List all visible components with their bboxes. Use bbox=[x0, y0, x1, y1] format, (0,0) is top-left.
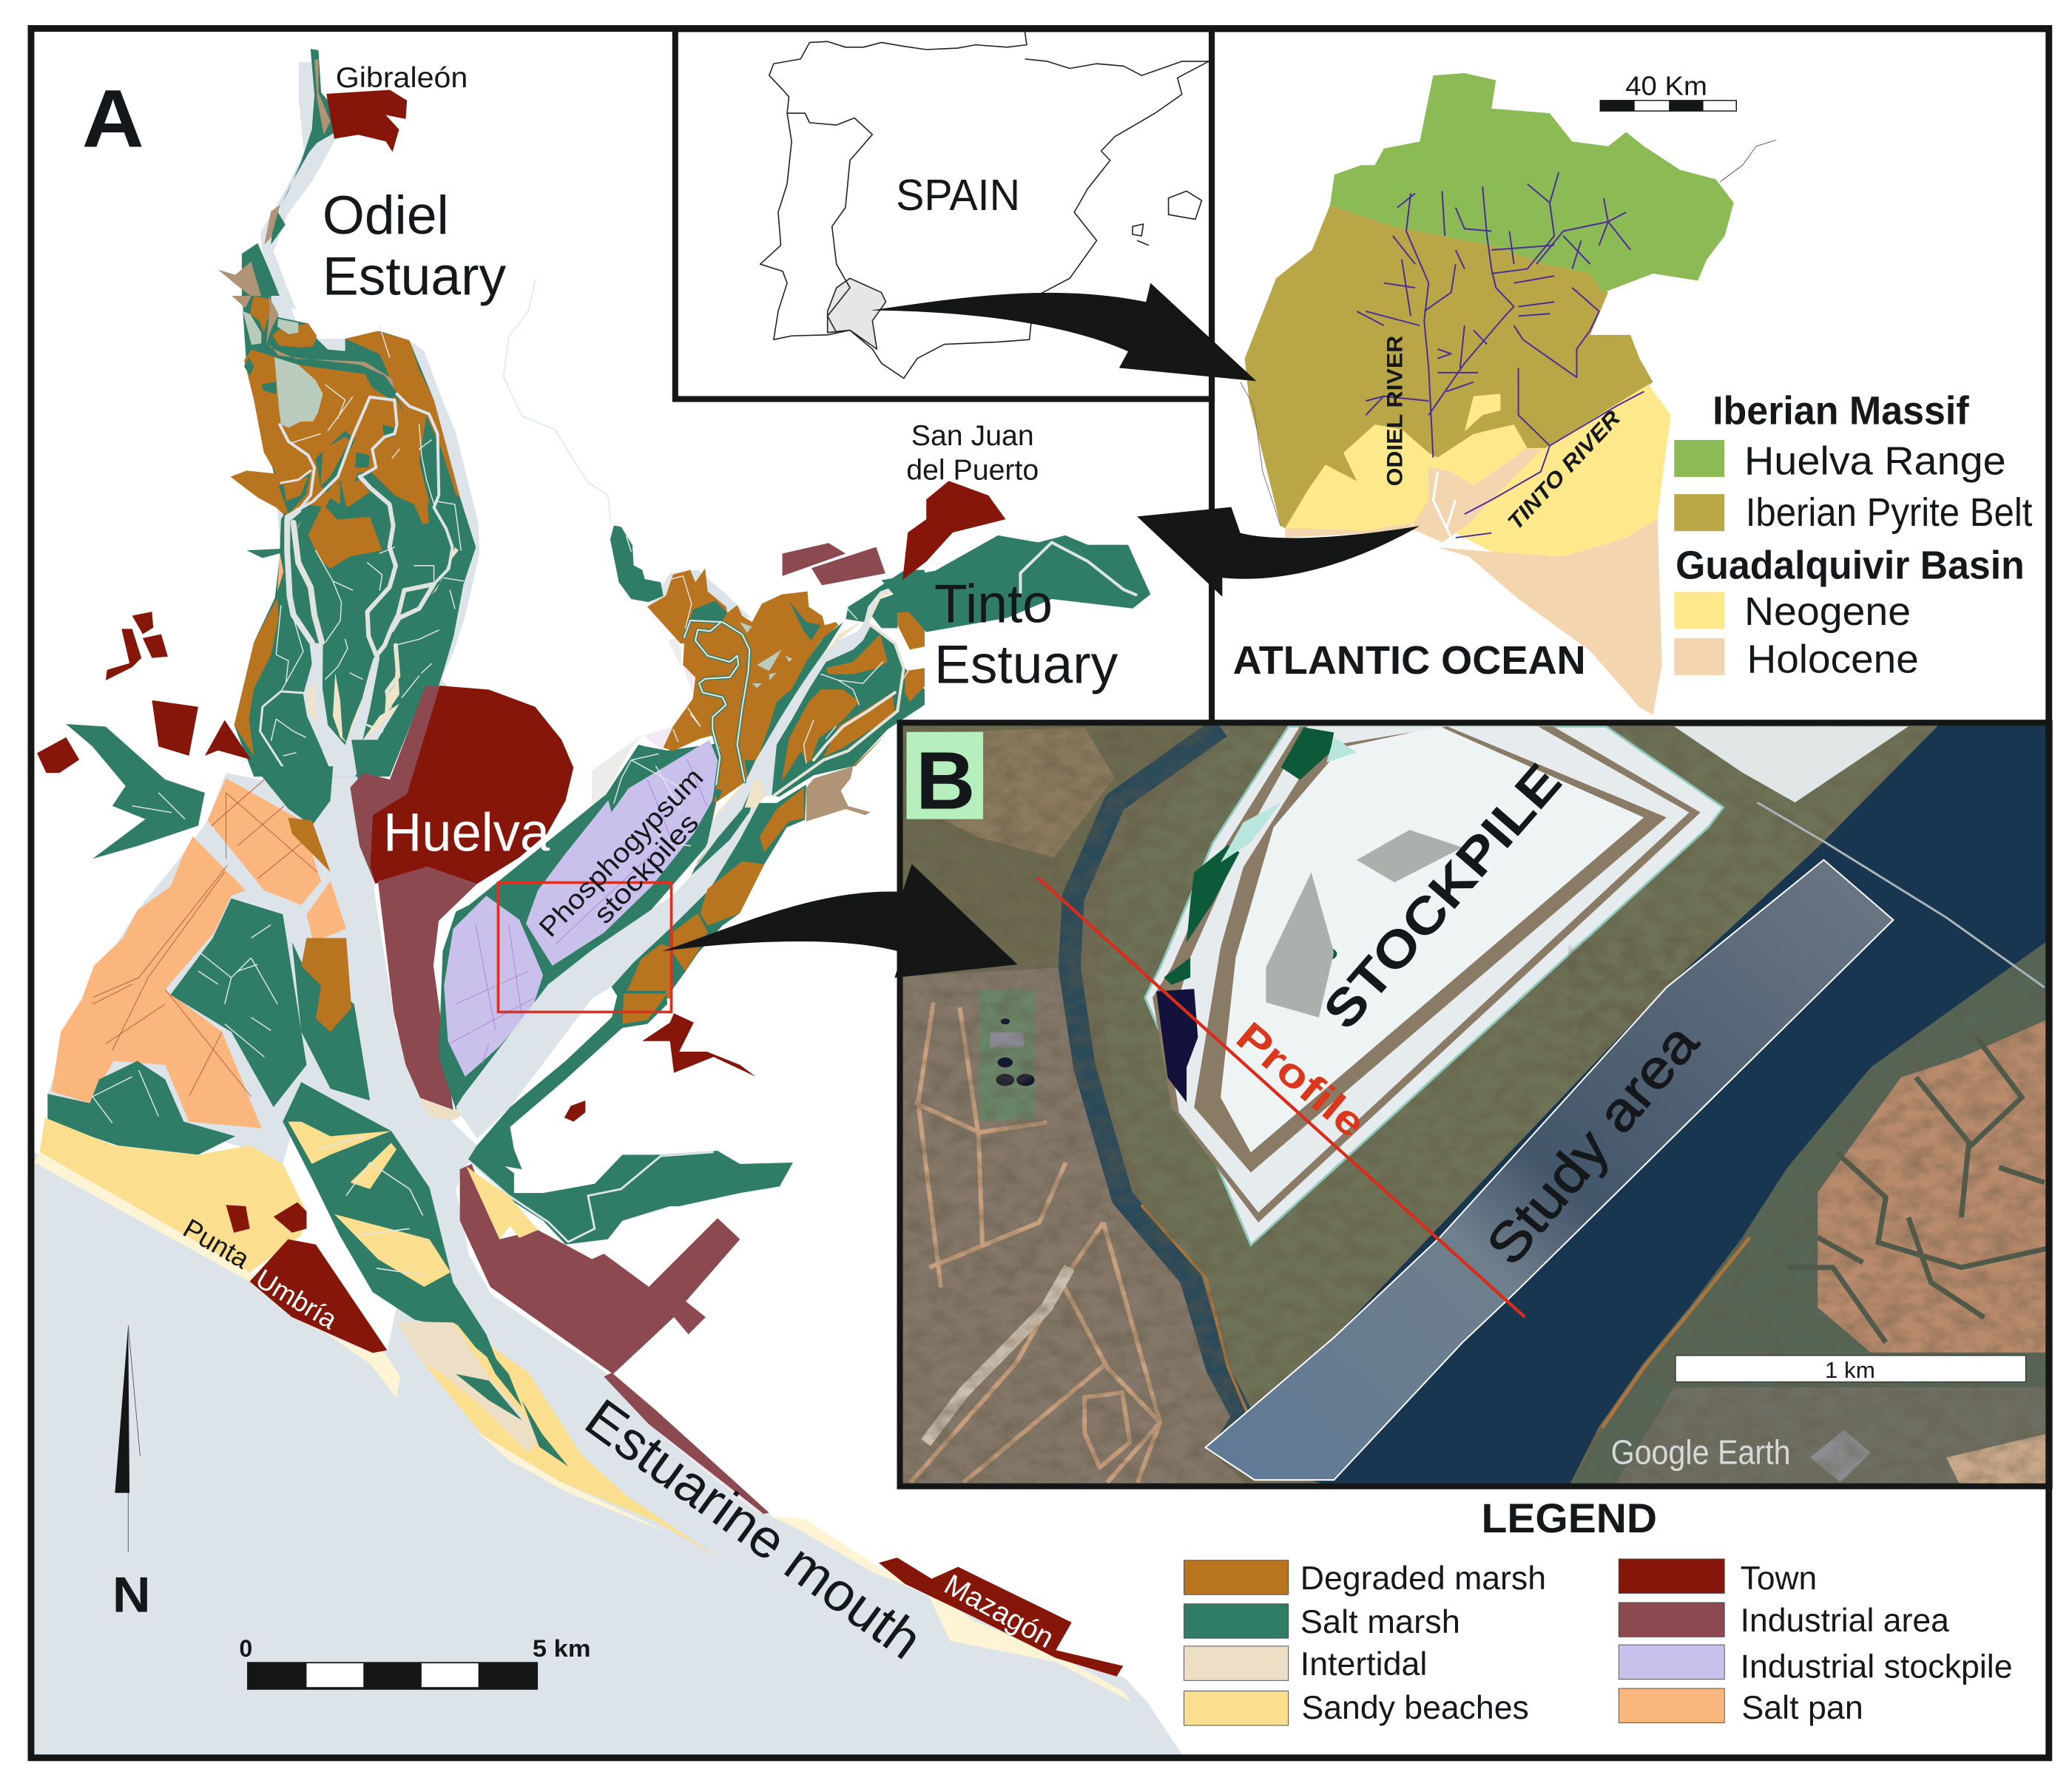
degraded marsh west lower bbox=[234, 598, 279, 756]
N label: N bbox=[112, 1567, 151, 1623]
teal strip along channel bbox=[757, 622, 843, 760]
satellite scale bar: 1 km bbox=[1825, 1359, 1875, 1383]
Tinto lower water bbox=[456, 950, 592, 1139]
stockpile north marsh bbox=[607, 745, 664, 812]
cream sand bars bbox=[296, 507, 459, 745]
marsh east of stockpile bbox=[1100, 728, 1946, 1447]
east island marsh bbox=[292, 942, 370, 1100]
salt pan dykes bbox=[92, 779, 317, 1097]
water halo bbox=[271, 296, 479, 686]
small salt pan bbox=[277, 553, 283, 592]
geology map bbox=[1241, 73, 1776, 714]
spit marsh fragments bbox=[449, 1314, 568, 1467]
label TINTO RIVER: TINTO RIVER bbox=[1503, 405, 1626, 535]
text Huelva Range: Huelva Range bbox=[1744, 439, 2006, 483]
teal bits in orange bbox=[244, 357, 433, 550]
lower right land bbox=[1613, 1387, 2052, 1487]
text intertidal: Intertidal bbox=[1300, 1646, 1427, 1683]
profile line bbox=[1037, 877, 1525, 1317]
halo bbox=[649, 570, 752, 619]
texture on marsh bbox=[1568, 938, 2052, 1487]
swatch Neogene bbox=[1674, 592, 1724, 629]
label Tinto Estuary: Estuary bbox=[934, 635, 1118, 695]
north arrow bbox=[115, 1325, 140, 1552]
text Neogene: Neogene bbox=[1744, 589, 1911, 634]
marsh east of trunk bbox=[351, 740, 396, 782]
orange patch island bbox=[301, 938, 351, 1032]
arrow: map A to panel B bbox=[662, 864, 1017, 978]
east Tinto marsh bbox=[881, 535, 1150, 632]
panel frame lines for geology map bbox=[1212, 29, 2048, 724]
canal shore bbox=[1141, 1205, 1249, 1418]
west salt marsh arm bbox=[66, 724, 205, 859]
swatch salt pan bbox=[1619, 1688, 1724, 1722]
label Estuarine mouth: Estuarine mouth bbox=[575, 1387, 933, 1671]
Punta Umbria blocks bbox=[226, 1203, 306, 1233]
teal upper right bbox=[846, 570, 925, 622]
treatment plant bbox=[979, 990, 1036, 1120]
coast line bbox=[1241, 382, 1280, 526]
eastern towns bbox=[564, 1013, 756, 1122]
inner terrace bbox=[1194, 726, 1667, 1172]
neogene patch bbox=[1465, 394, 1500, 432]
stream top-right bbox=[1721, 140, 1776, 182]
trunk water bbox=[303, 643, 399, 777]
south spit yellow bbox=[415, 1322, 716, 1556]
swatch industrial area bbox=[1619, 1603, 1724, 1637]
teal band under top bbox=[280, 346, 302, 348]
teal in north block bbox=[690, 601, 821, 802]
panel A: estuary map bbox=[34, 49, 1185, 1759]
geology scale bar: 40 Km bbox=[1625, 72, 1707, 101]
light embankment bbox=[926, 1268, 1070, 1442]
salt pans south bbox=[52, 836, 262, 1129]
salt pans north bbox=[207, 778, 321, 905]
grey smudges bbox=[1266, 830, 1462, 1018]
label Profile: Profile bbox=[1228, 1013, 1374, 1146]
panel: Spain locator bbox=[675, 29, 1212, 399]
label Odiel Estuary: Estuary bbox=[323, 246, 507, 306]
brown and grey top pieces bbox=[232, 296, 252, 308]
south Tinto arm bbox=[468, 1146, 793, 1245]
scale bar: 0 bbox=[239, 1635, 252, 1662]
western towns bbox=[37, 612, 251, 773]
label San Juan del Puerto: San Juan bbox=[911, 419, 1034, 452]
grey ground bbox=[592, 734, 644, 812]
inner teal loop bbox=[871, 593, 925, 628]
top-right stockpile bbox=[1674, 726, 1909, 802]
south band marsh bbox=[612, 785, 806, 998]
label Gibraleon: Gibraleón bbox=[336, 61, 468, 94]
text salt marsh: Salt marsh bbox=[1300, 1604, 1460, 1640]
river bbox=[1206, 717, 2072, 1487]
neogene bbox=[1285, 385, 1671, 557]
pyrite belt bbox=[1245, 205, 1653, 533]
roads bbox=[911, 1002, 1160, 1483]
San Juan industrial blocks bbox=[783, 543, 885, 585]
brown stream bbox=[269, 343, 394, 389]
river shore bbox=[1602, 1237, 1749, 1427]
label Odiel Estuary: Odiel bbox=[323, 185, 449, 246]
label Tinto Estuary: Tinto bbox=[934, 573, 1053, 634]
upper river marsh fragments bbox=[217, 49, 334, 311]
south band orange bbox=[627, 788, 804, 998]
rivers bbox=[1357, 172, 1644, 538]
holocene left bbox=[1285, 524, 1415, 538]
Iberia outline bbox=[760, 32, 1209, 379]
arrow: Spain to geology map bbox=[871, 283, 1256, 381]
dark green patches bbox=[1164, 728, 1337, 985]
salt pan small bbox=[306, 882, 346, 942]
pale strip at estuary mouth bbox=[647, 1424, 764, 1514]
west island marsh bbox=[170, 899, 306, 1107]
legend title: LEGEND bbox=[1482, 1495, 1657, 1541]
label Huelva: Huelva bbox=[383, 802, 550, 862]
south spit sand bbox=[476, 1431, 716, 1556]
central lower island bbox=[283, 1082, 486, 1334]
text town: Town bbox=[1741, 1560, 1817, 1597]
west beach bbox=[40, 1117, 306, 1272]
text salt pan: Salt pan bbox=[1741, 1690, 1863, 1726]
outer terrace bbox=[1153, 726, 1701, 1222]
main channels bbox=[260, 326, 464, 768]
sea and estuary water bbox=[34, 714, 1185, 1759]
stockpile upper bbox=[526, 740, 719, 966]
spit intertidal bbox=[396, 1321, 541, 1453]
teal arm bbox=[610, 525, 664, 602]
pond bbox=[1156, 989, 1198, 1103]
south-west marsh bbox=[47, 1061, 235, 1154]
Punta Umbria town bbox=[250, 1240, 387, 1353]
swatch Iberian Pyrite Belt bbox=[1674, 494, 1724, 531]
island yellow strips bbox=[288, 1122, 450, 1287]
canal bbox=[1070, 728, 1243, 1452]
legend heading Guadalquivir Basin: Guadalquivir Basin bbox=[1676, 543, 2025, 587]
text industrial stockpile: Industrial stockpile bbox=[1741, 1649, 2013, 1685]
label Mazagon: Mazagón bbox=[939, 1568, 1059, 1654]
arrow: geology map to estuary bbox=[1137, 507, 1420, 597]
label A: A bbox=[82, 73, 144, 164]
Huelva industrial strip bbox=[350, 686, 440, 884]
channel island bbox=[692, 785, 757, 875]
aqua haze near green patches bbox=[1221, 737, 1357, 862]
legend heading Iberian Massif: Iberian Massif bbox=[1712, 388, 1969, 433]
satellite scale bar bbox=[1676, 1356, 2025, 1383]
stockpile lower-left bbox=[444, 896, 543, 1077]
label STOCKPILE: STOCKPILE bbox=[1312, 753, 1573, 1040]
land base bbox=[888, 717, 2072, 1498]
upper Odiel river band bbox=[260, 62, 336, 309]
geology scale bar bbox=[1600, 72, 1736, 111]
holocene bbox=[1437, 519, 1662, 714]
bridge bbox=[1757, 802, 2045, 987]
south arm channel bbox=[468, 1152, 714, 1242]
inner orange patches bbox=[283, 437, 429, 569]
stockpile marsh surround bbox=[439, 744, 724, 1110]
swatch Huelva Range bbox=[1674, 440, 1724, 477]
right marsh bbox=[1568, 938, 2052, 1487]
faint stream bbox=[504, 280, 610, 522]
plateau bbox=[1221, 726, 1644, 1152]
Tinto south shore orange bbox=[622, 993, 667, 1024]
degraded marsh east strip bbox=[345, 331, 460, 497]
Gibraleon town bbox=[326, 90, 407, 152]
label Atlantic Ocean: ATLANTIC OCEAN bbox=[1233, 638, 1586, 683]
text industrial area: Industrial area bbox=[1741, 1603, 1949, 1639]
texture on land bbox=[888, 717, 2072, 1498]
text Iberian Pyrite Belt: Iberian Pyrite Belt bbox=[1746, 490, 2033, 535]
brown patch bbox=[806, 766, 871, 822]
Tinto estuary detail bbox=[592, 525, 925, 998]
sand near Mazagon bbox=[769, 1515, 1131, 1702]
south industrial area bbox=[460, 1164, 740, 1374]
study area bbox=[1206, 860, 1893, 1480]
label SPAIN: SPAIN bbox=[896, 172, 1020, 220]
degraded marsh main bbox=[231, 350, 429, 524]
geology legend bbox=[1674, 388, 2033, 681]
swatch town bbox=[1619, 1559, 1724, 1593]
small marsh creeks bbox=[92, 793, 277, 1123]
estuary white channels bbox=[1433, 472, 1456, 538]
Tinto estuary grounds bbox=[592, 570, 752, 812]
south yellow triangle bbox=[467, 1166, 538, 1240]
Odiel estuary marshes bbox=[231, 296, 479, 777]
Tinto water bbox=[592, 586, 925, 998]
west channel water bbox=[47, 773, 325, 1164]
label Punta: Punta bbox=[178, 1213, 255, 1275]
selected area rectangle bbox=[498, 882, 671, 1012]
label Study area: Study area bbox=[1475, 1012, 1710, 1276]
degraded marsh top bbox=[272, 323, 317, 348]
label Phosphogypsum stockpiles: Phosphogypsum bbox=[533, 762, 709, 943]
text Holocene: Holocene bbox=[1747, 637, 1919, 681]
Huelva industrial south bbox=[378, 867, 477, 1110]
green patches bbox=[740, 622, 793, 688]
label Phosphogypsum stockpiles: stockpiles bbox=[587, 808, 704, 930]
swatch Holocene bbox=[1674, 638, 1724, 675]
Tinto south shore band bbox=[468, 991, 667, 1169]
swatch degraded marsh bbox=[1184, 1560, 1289, 1594]
stockpile lines bbox=[449, 760, 707, 1063]
scale bar bbox=[239, 1635, 590, 1690]
salt marsh base bbox=[234, 296, 476, 777]
top-left scrub bbox=[888, 717, 1213, 978]
left land bbox=[888, 967, 1251, 1487]
lilac ground bbox=[644, 662, 695, 749]
salmon marsh patches bbox=[1818, 1018, 2052, 1353]
text sandy beaches: Sandy beaches bbox=[1302, 1690, 1529, 1726]
Google Earth mark: Google Earth bbox=[1611, 1433, 1791, 1471]
island creeks bbox=[317, 1136, 423, 1275]
panel B: satellite image bbox=[888, 717, 2072, 1498]
west arm bbox=[246, 549, 283, 558]
Huelva town bbox=[370, 686, 573, 884]
orange marsh near salt pans bbox=[288, 818, 331, 872]
channels in south block bbox=[614, 536, 925, 962]
label ODIEL RIVER: ODIEL RIVER bbox=[1383, 336, 1407, 486]
estuary holocene bbox=[1411, 448, 1541, 542]
panel B frame bbox=[900, 723, 2050, 1487]
map legend bbox=[1184, 1495, 2013, 1726]
lake bbox=[274, 357, 323, 427]
label San Juan del Puerto: del Puerto bbox=[906, 453, 1039, 486]
orange north block bbox=[647, 569, 838, 822]
label B: B bbox=[916, 735, 975, 826]
industrial strip to the south-east bbox=[604, 1373, 769, 1514]
scale bar: 5 km bbox=[533, 1635, 590, 1662]
swatch intertidal bbox=[1184, 1646, 1289, 1680]
orange in south block bbox=[782, 606, 925, 782]
stockpile outer bbox=[1145, 726, 1724, 1245]
text degraded marsh: Degraded marsh bbox=[1300, 1560, 1546, 1597]
swatch industrial stockpile bbox=[1619, 1645, 1724, 1680]
swatch sandy beaches bbox=[1184, 1691, 1289, 1725]
label Umbria: Umbría bbox=[251, 1263, 342, 1335]
Huelva range bbox=[1330, 73, 1734, 292]
teal south block bbox=[772, 626, 925, 797]
sand by Huelva industrial bbox=[420, 1070, 482, 1120]
marsh creeks bbox=[1787, 1038, 2052, 1342]
cream sand bbox=[675, 620, 863, 892]
swatch salt marsh bbox=[1184, 1604, 1289, 1638]
marsh north of salt pans bbox=[255, 766, 333, 826]
San Juan town bbox=[902, 481, 1005, 580]
Mazagon town bbox=[879, 1558, 1123, 1677]
pale sand west bbox=[34, 1152, 400, 1398]
